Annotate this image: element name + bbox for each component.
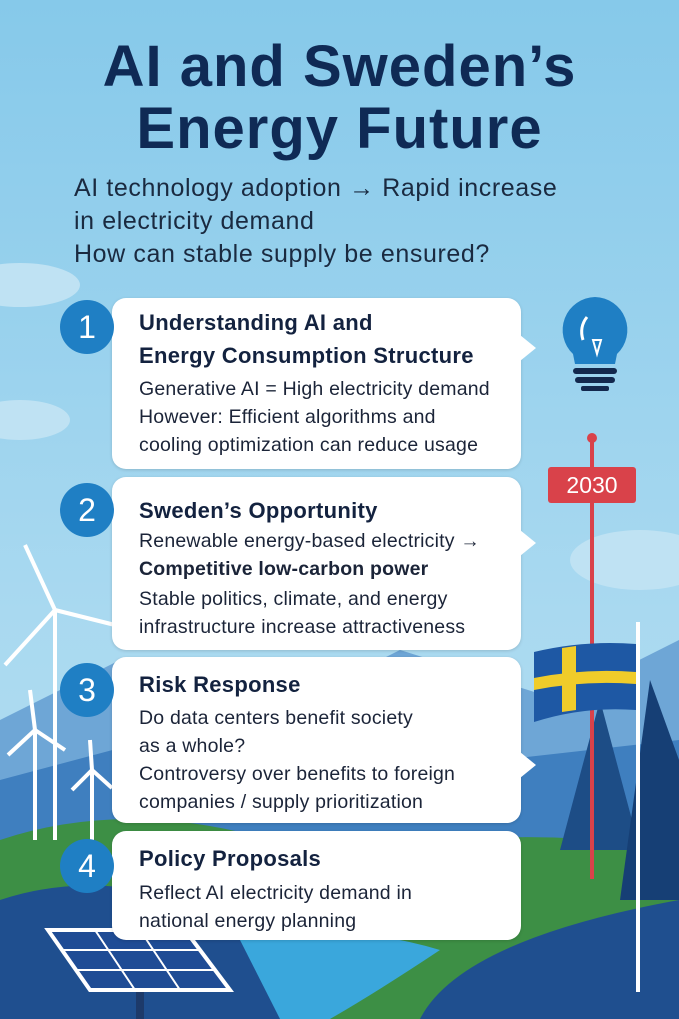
- card 1: [111, 298, 536, 471]
- text: Competitive low-carbon power: [139, 558, 428, 580]
- card 4: [112, 831, 521, 940]
- white flagpole: [636, 622, 640, 992]
- badge 3: 3: [78, 672, 96, 708]
- pole with 2030 sign: [548, 433, 636, 879]
- badge 2: [60, 483, 114, 537]
- text: Sweden’s Opportunity: [139, 498, 378, 523]
- icon: solar panel: [44, 928, 234, 1019]
- badge 1: 1: [78, 309, 96, 345]
- text: companies / supply prioritization: [139, 791, 423, 813]
- text: Risk Response: [139, 672, 301, 697]
- icon: lightbulb: [562, 297, 628, 391]
- badge 4: [60, 839, 114, 893]
- heading 1: Energy Consumption Structure: [139, 343, 474, 368]
- card 3: [111, 657, 536, 825]
- sign: 2030: 2030: [566, 472, 618, 498]
- badge 4: 4: [78, 848, 96, 884]
- text: Renewable energy-based electricity →: [139, 530, 480, 552]
- text: Controversy over benefits to foreign: [139, 763, 455, 785]
- card 4: national energy planning: [139, 910, 356, 932]
- text: Do data centers benefit society: [139, 707, 413, 729]
- body 1: [139, 378, 490, 456]
- body 1: cooling optimization can reduce usage: [139, 434, 478, 456]
- card 4: Reflect AI electricity demand in: [139, 882, 412, 904]
- icon: Swedish flag: [534, 643, 636, 722]
- text: Stable politics, climate, and energy: [139, 588, 448, 610]
- heading 1: [139, 310, 474, 368]
- badge 3: [60, 663, 114, 717]
- card 2: [111, 477, 536, 652]
- subtitle: [74, 174, 557, 268]
- icon: wind turbines: [4, 544, 112, 840]
- badge 2: 2: [78, 492, 96, 528]
- text: as a whole?: [139, 735, 245, 757]
- text: infrastructure increase attractiveness: [139, 616, 465, 638]
- badge 1: [60, 300, 114, 354]
- title: Energy Future: [136, 96, 543, 161]
- subtitle: AI technology adoption → Rapid increase: [74, 174, 557, 202]
- subtitle: in electricity demand: [74, 207, 314, 235]
- heading 1: Understanding AI and: [139, 310, 373, 335]
- body 1: Generative AI = High electricity demand: [139, 378, 490, 400]
- card 4: Policy Proposals: [139, 846, 321, 871]
- title: AI and Sweden’s: [103, 34, 576, 99]
- subtitle: How can stable supply be ensured?: [74, 240, 490, 268]
- title: [103, 34, 576, 161]
- sign: 2030: [548, 467, 636, 503]
- body 1: However: Efficient algorithms and: [139, 406, 436, 428]
